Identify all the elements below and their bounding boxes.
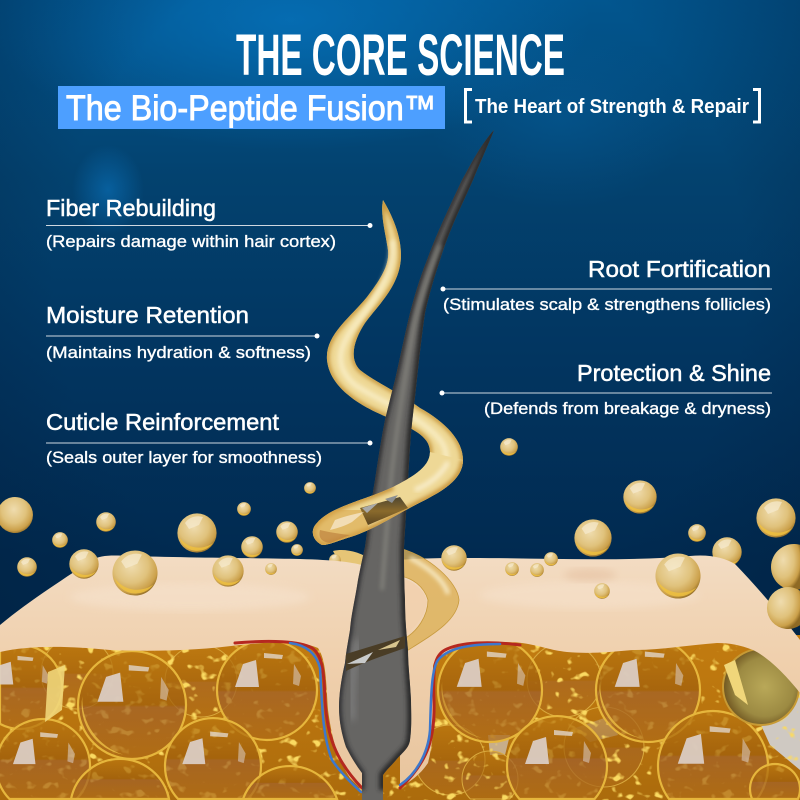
label: moisture retention — [46, 302, 320, 362]
ribbon: peptide strand, back — [313, 200, 463, 572]
label: protection and shine: (Defends from breakage & dryness) — [484, 399, 771, 418]
label: moisture retention: (Maintains hydration & softness) — [46, 343, 311, 362]
label: root fortification: Root Fortification — [588, 256, 771, 282]
label: root fortification: (Stimulates scalp & strengthens follicles) — [443, 295, 771, 314]
golden spheres under the skin — [0, 635, 800, 800]
blood vessels — [235, 641, 520, 792]
skin: right lobe — [400, 555, 800, 787]
droplets — [0, 438, 800, 590]
label: fiber rebuilding — [46, 195, 372, 251]
label: moisture retention: Moisture Retention — [46, 302, 249, 328]
bracketed tagline — [466, 90, 760, 122]
ribbon: lower ring around follicle — [395, 547, 459, 654]
hair shaft with follicle bulb — [339, 130, 494, 800]
label: root fortification — [440, 256, 772, 314]
label: cuticle reinforcement: Cuticle Reinforcement — [46, 409, 280, 435]
label: fiber rebuilding: (Repairs damage within hair cortex) — [46, 232, 336, 251]
label: fiber rebuilding: Fiber Rebuilding — [46, 195, 216, 221]
ribbon: front section crossing hair — [310, 452, 463, 550]
skin: left lobe — [0, 555, 362, 790]
title: THE CORE SCIENCE — [236, 23, 565, 88]
label: protection and shine: Protection & Shine — [577, 360, 771, 386]
droplets resting on the skin — [69, 545, 800, 629]
label: cuticle reinforcement — [46, 409, 372, 467]
bracketed tagline: The Heart of Strength & Repair — [475, 96, 749, 118]
ribbon: band in front of follicle — [346, 636, 405, 671]
label: cuticle reinforcement: (Seals outer layer for smoothness) — [46, 448, 322, 467]
label: protection and shine — [440, 360, 772, 418]
subtitle badge: The Bio-Peptide Fusion™ — [66, 89, 436, 128]
